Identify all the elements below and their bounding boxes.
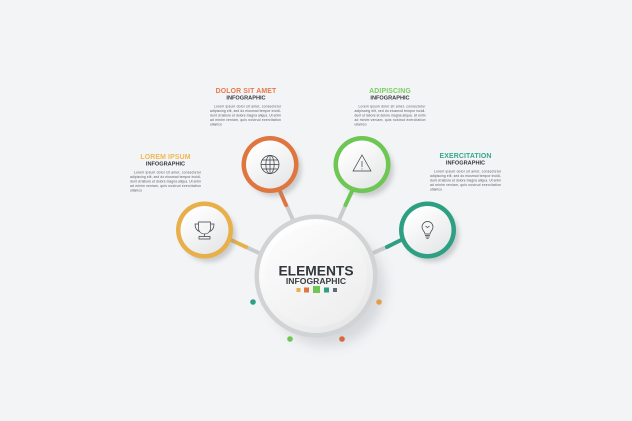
body: adipiscing elit, sed do eiusmod tempor incidi-: [210, 109, 281, 113]
node: red globe: [242, 136, 302, 196]
heading: ADIPISCING: [369, 88, 411, 95]
dot: green: [287, 336, 293, 342]
body: dunt ut labore et dolore magna aliqua. Ut enim: [430, 178, 501, 182]
colour squares: [296, 286, 337, 293]
text block: adipiscing: [354, 88, 426, 126]
connector: yellow: [230, 240, 259, 253]
node: yellow trophy: [176, 202, 236, 262]
subheading: INFOGRAPHIC: [226, 96, 266, 102]
body: Lorem ipsum dolor sit amet, consectetur: [434, 170, 502, 174]
body: [430, 170, 502, 192]
connector: red: [279, 189, 293, 220]
dot: teal: [250, 299, 256, 305]
body: ullamco: [430, 188, 442, 192]
icon: globe: [261, 156, 279, 174]
body: dunt ut labore et dolore magna aliqua. Ut enim: [210, 114, 281, 118]
icon: trophy: [195, 222, 214, 239]
heading: EXERCITATION: [439, 153, 492, 160]
text block: lorem ipsum: [130, 154, 202, 192]
central circle: [254, 214, 385, 346]
body: adipiscing elit, sed do eiusmod tempor incidi-: [430, 174, 501, 178]
heading: DOLOR SIT AMET: [216, 88, 277, 95]
body: Lorem ipsum dolor sit amet, consectetur: [214, 104, 282, 108]
body: adipiscing elit, sed do eiusmod tempor incidi-: [354, 109, 426, 113]
body: [210, 104, 282, 126]
body: Lorem ipsum dolor sit amet, consectetur: [134, 170, 202, 174]
body: [130, 170, 202, 192]
body: adipiscing elit, sed do eiusmod tempor incidi-: [130, 175, 201, 179]
body: ad minim veniam, quis nostrud exercitation: [430, 183, 501, 187]
central title: ELEMENTS: [278, 264, 354, 278]
body: Lorem ipsum dolor sit amet, consectetur: [358, 104, 426, 108]
node: green warning: [334, 136, 394, 196]
body: ad minim veniam, quis nostrud exercitation: [354, 118, 426, 122]
heading: LOREM IPSUM: [140, 154, 191, 161]
subheading: INFOGRAPHIC: [446, 160, 485, 166]
body: ad minim veniam, quis nostrud exercitation: [210, 118, 281, 122]
subheading: INFOGRAPHIC: [146, 162, 185, 168]
dot: red: [339, 336, 345, 342]
body: dunt ut labore et dolore magna aliqua. Ut enim: [130, 180, 201, 184]
body: [354, 104, 426, 126]
body: ad minim veniam, quis nostrud exercitation: [130, 184, 201, 188]
body: ullamco: [130, 188, 142, 192]
subheading: INFOGRAPHIC: [370, 96, 410, 102]
body: ullamco: [354, 122, 367, 126]
icon: light bulb: [422, 222, 433, 238]
text block: exercitation: [430, 153, 502, 192]
body: dunt ut labore et dolore magna aliqua. Ut enim: [354, 114, 426, 118]
central subtitle: INFOGRAPHIC: [286, 276, 346, 286]
connector: teal: [373, 240, 402, 253]
icon: warning triangle: [353, 155, 371, 171]
body: ullamco: [210, 122, 222, 126]
node: teal bulb: [399, 202, 459, 262]
dot: orange: [376, 299, 382, 305]
connector: green: [339, 189, 353, 220]
text block: dolor sit amet: [210, 88, 282, 126]
